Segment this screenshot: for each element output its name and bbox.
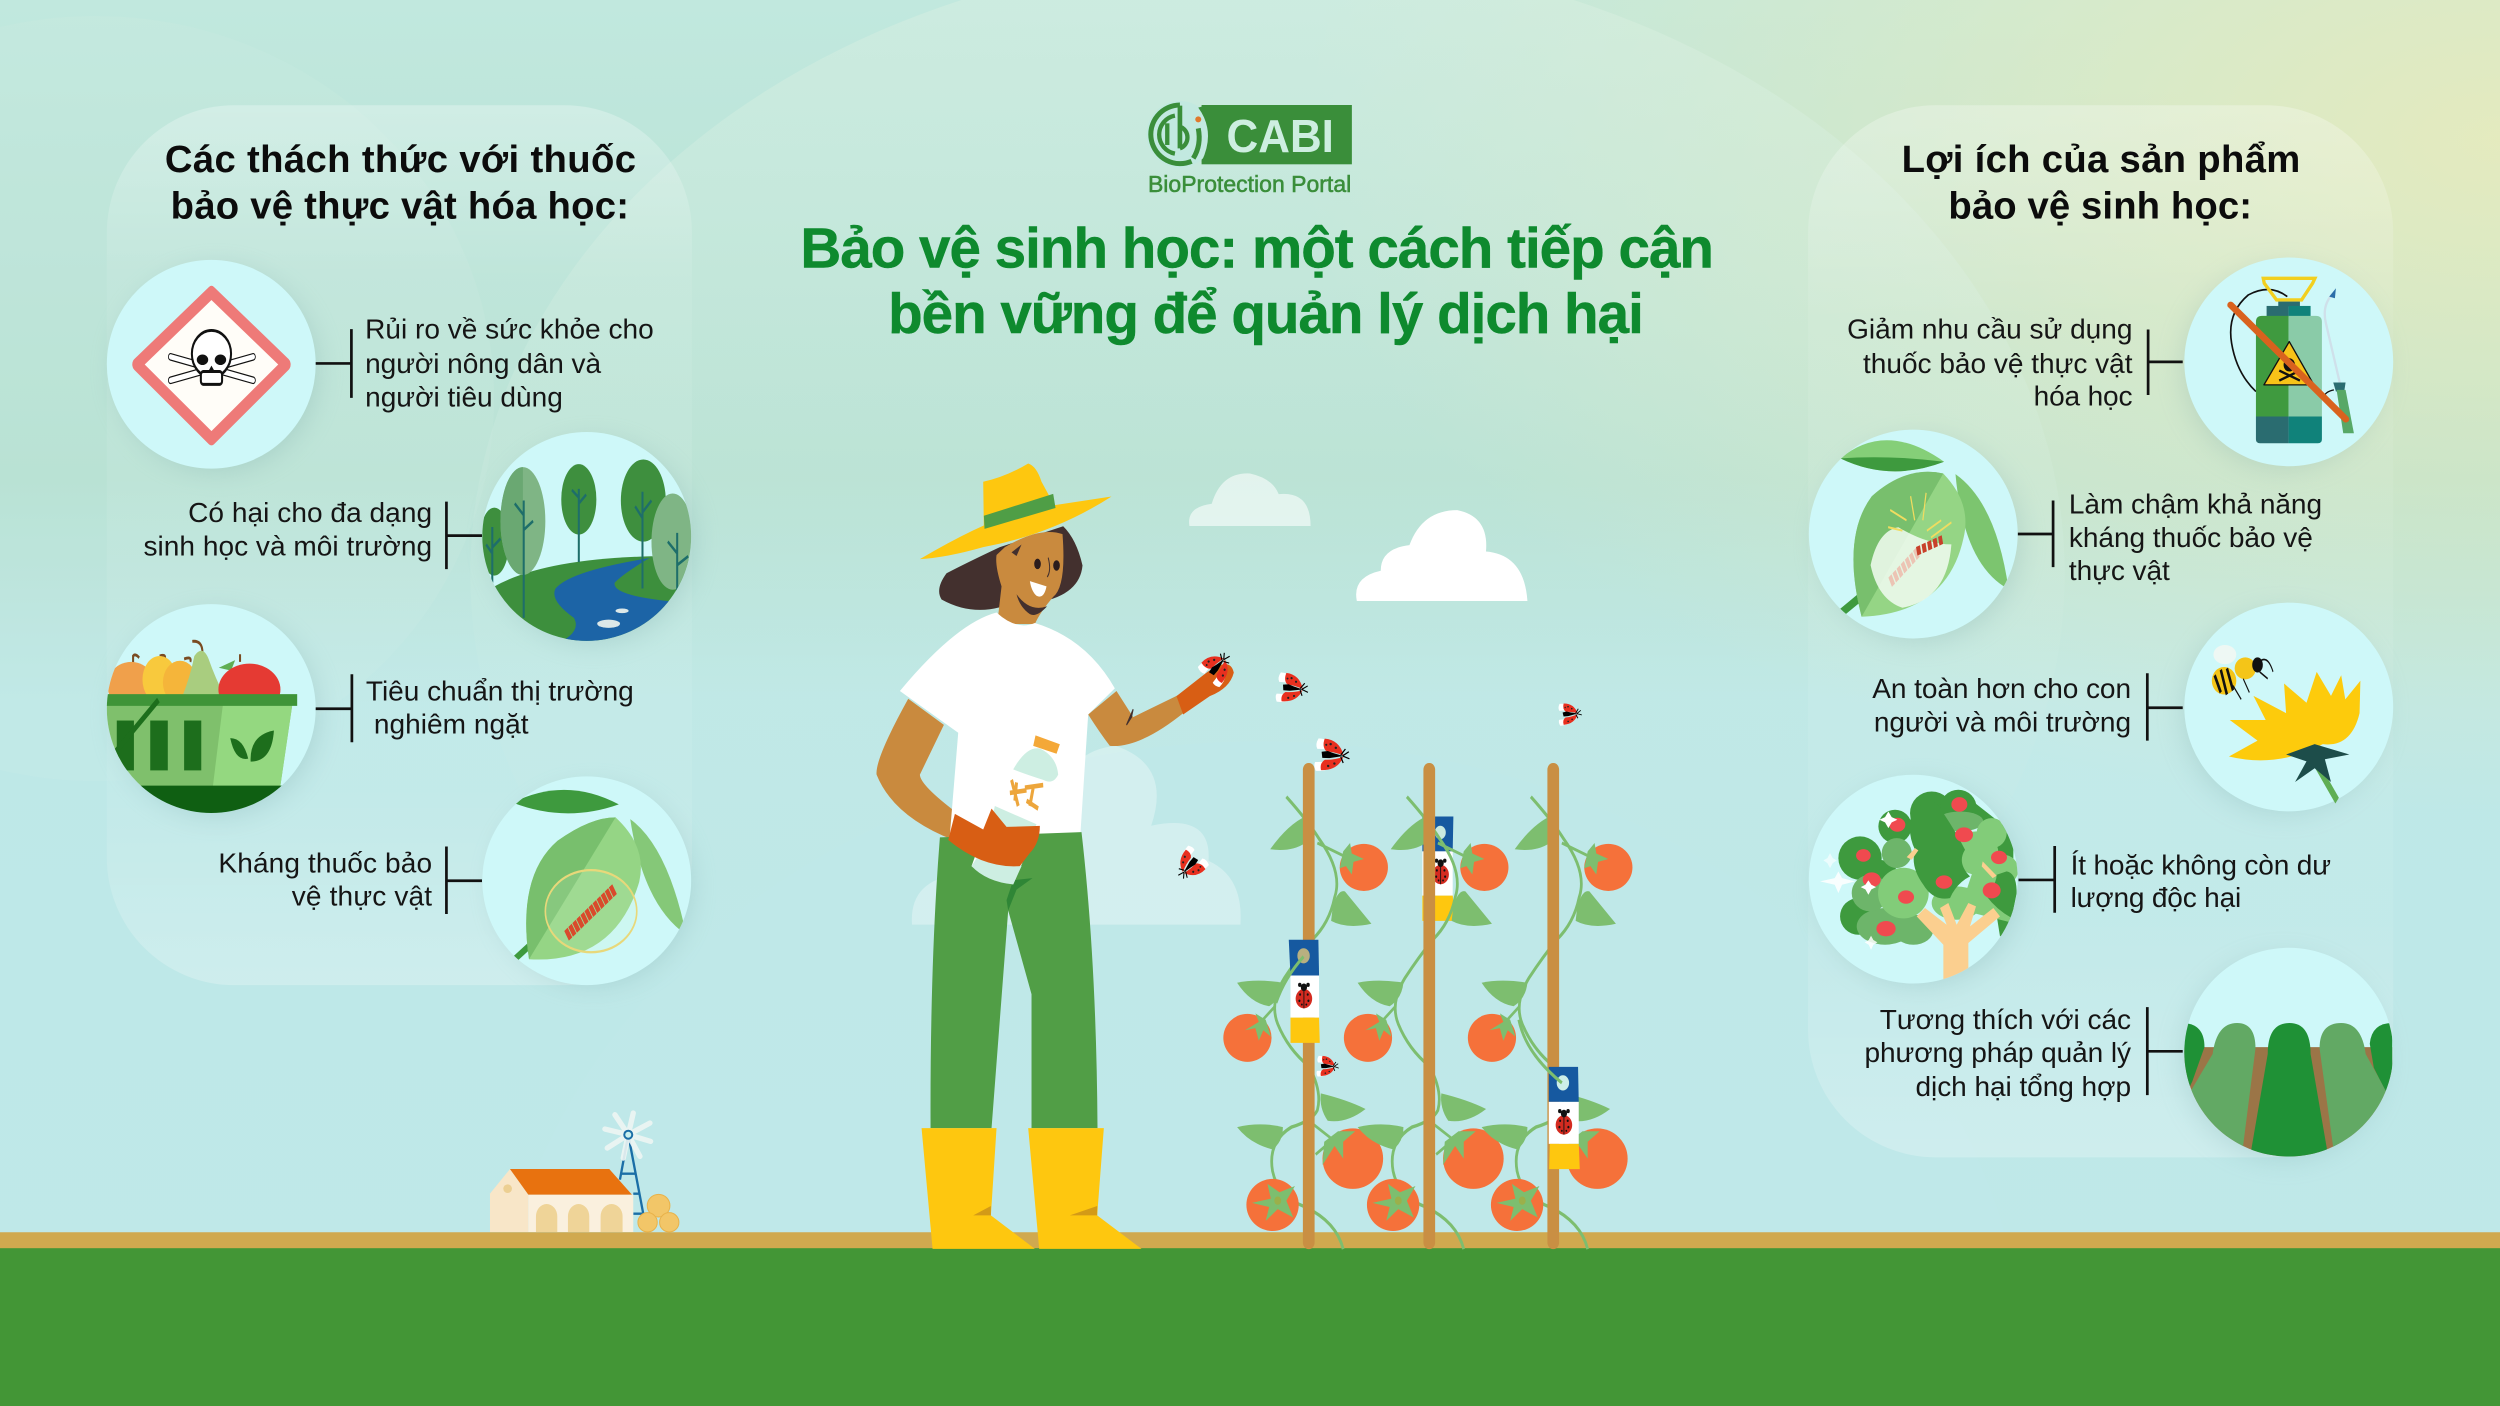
text R3: An toàn hơn cho con — [1872, 673, 2131, 704]
text L1: người tiêu dùng — [365, 381, 563, 412]
plant 3 — [1468, 763, 1632, 1249]
plant 3 tag — [1519, 1020, 1580, 1169]
neck and face — [996, 532, 1063, 624]
plant 1 — [1223, 763, 1388, 1249]
bracket R4 — [2018, 846, 2055, 913]
barn — [490, 1169, 528, 1232]
text R1: thuốc bảo vệ thực vật — [1863, 348, 2133, 379]
logo: CABI BioProtection Portal — [1147, 101, 1352, 197]
icon: landscape circle — [480, 432, 694, 647]
text L2: sinh học và môi trường — [143, 531, 432, 562]
text R1: hóa học — [2034, 381, 2132, 412]
text L4: Kháng thuốc bảo — [218, 847, 432, 878]
icon: crop rows circle — [2182, 948, 2393, 1161]
heading: benefits — [1902, 138, 2300, 227]
panel: challenges background — [107, 105, 692, 985]
bracket R3 — [2147, 673, 2183, 741]
plant 2 — [1344, 763, 1508, 1249]
icon: leaf with dying caterpillar circle — [1809, 430, 2018, 639]
text L1 — [365, 314, 654, 412]
text L1: Rủi ro về sức khỏe cho — [365, 314, 654, 345]
trousers — [931, 832, 1098, 1128]
icon: crossed sprayer circle — [2184, 257, 2393, 467]
icon: hazard skull circle — [107, 260, 316, 469]
ladybug 6 — [1317, 1056, 1339, 1077]
logo name: CABI — [1227, 110, 1334, 162]
text R4 — [2071, 849, 2331, 913]
text R3 — [1872, 673, 2131, 738]
bottle — [972, 735, 1060, 884]
text L2 — [143, 497, 432, 562]
text L4: vệ thực vật — [292, 881, 432, 912]
text R1 — [1847, 314, 2133, 412]
text R5: Tương thích với các — [1880, 1004, 2131, 1035]
shirt — [900, 613, 1115, 843]
farmhouse with windmill and hay — [490, 1113, 679, 1232]
title: bền vững để quản lý dịch hại — [888, 282, 1644, 345]
text R2 — [2069, 488, 2322, 586]
text R5: phương pháp quản lý — [1864, 1037, 2131, 1068]
text R4: Ít hoặc không còn dư — [2071, 849, 2331, 880]
panel: benefits background — [1808, 105, 2393, 1157]
logo subtitle: BioProtection Portal — [1148, 171, 1351, 197]
icon: fruit tree circle — [1809, 775, 2018, 984]
ladybug 3 — [1314, 738, 1350, 772]
bracket L2 — [446, 502, 482, 569]
title — [800, 216, 1714, 345]
text L4 — [218, 847, 432, 912]
ladybug 5 — [1169, 845, 1211, 886]
windmill — [605, 1113, 651, 1214]
text R2: thực vật — [2069, 555, 2170, 586]
icon: fruit basket circle — [102, 604, 316, 817]
text R4: lượng độc hại — [2071, 882, 2241, 913]
ground — [0, 1232, 2500, 1406]
bracket R5 — [2147, 1007, 2183, 1095]
heading: challenges — [165, 138, 636, 227]
text R1: Giảm nhu cầu sử dụng — [1847, 314, 2132, 345]
heading: challenges: Các thách thức với thuốc — [165, 138, 636, 181]
text L3 — [366, 676, 634, 739]
text R2: Làm chậm khả năng — [2069, 488, 2322, 519]
logo mark — [1147, 101, 1352, 168]
plant 2 tag — [1422, 816, 1455, 921]
bracket L3 — [316, 674, 352, 742]
heading: challenges: bảo vệ thực vật hóa học: — [171, 184, 629, 227]
text L3: nghiêm ngặt — [374, 708, 529, 739]
heading: benefits: bảo vệ sinh học: — [1948, 184, 2252, 227]
text R5 — [1864, 1004, 2131, 1102]
text L3: Tiêu chuẩn thị trường — [366, 676, 634, 707]
bracket R2 — [2018, 501, 2053, 567]
text R3: người và môi trường — [1874, 707, 2131, 738]
hay bales — [638, 1194, 679, 1232]
text L2: Có hại cho đa dạng — [188, 497, 432, 528]
text R5: dịch hại tổng hợp — [1915, 1071, 2131, 1102]
hat — [920, 496, 1112, 559]
icon: leaf with caterpillar circle — [482, 776, 691, 985]
ladybug 4 — [1557, 702, 1583, 726]
tomato plants — [1223, 763, 1632, 1249]
right arm — [1088, 691, 1185, 746]
boots — [922, 1128, 1035, 1249]
plant 1 tag — [1276, 940, 1320, 1043]
hair — [939, 526, 1083, 610]
icon: bee and flower circle — [2184, 603, 2393, 811]
bracket L1 — [316, 329, 351, 398]
title: Bảo vệ sinh học: một cách tiếp cận — [800, 216, 1714, 279]
clouds — [912, 473, 1527, 925]
ladybug 2 — [1275, 672, 1309, 704]
text L1: người nông dân và — [365, 348, 601, 379]
farmer — [876, 464, 1234, 1249]
glove left — [948, 809, 1040, 866]
ladybug on hand — [1196, 645, 1239, 688]
glove right — [1176, 664, 1234, 714]
heading: benefits: Lợi ích của sản phẩm — [1902, 138, 2300, 181]
left arm — [876, 699, 958, 840]
bracket R1 — [2148, 330, 2183, 395]
bracket L4 — [446, 846, 482, 914]
text R2: kháng thuốc bảo vệ — [2069, 522, 2313, 553]
